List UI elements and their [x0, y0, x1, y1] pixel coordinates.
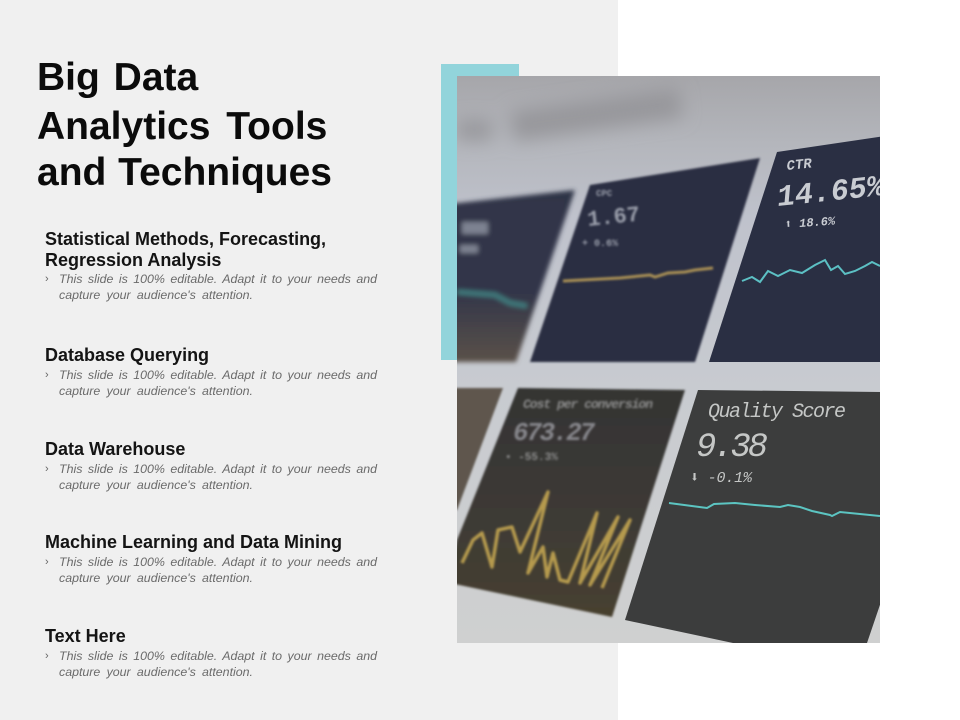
panel: left blurred dashboard card — [450, 190, 575, 362]
card text: CTR — [786, 156, 813, 175]
card text — [582, 189, 641, 250]
panel: CTR dashboard card — [709, 136, 888, 362]
list item: database querying: › — [45, 369, 49, 381]
panel: cost per conversion card — [450, 388, 685, 617]
card text: Cost per conversion — [523, 397, 653, 412]
list item: text here: › — [45, 650, 49, 662]
list item: machine learning: capture your audience's attention. — [59, 571, 253, 585]
card text: + 0.6% — [582, 239, 618, 250]
gold line chart — [462, 492, 630, 588]
list item: database querying: This slide is 100% editable. Adapt it to your needs and — [59, 368, 377, 382]
card text: ⬆ 18.6% — [784, 214, 836, 232]
list item: statistical methods: Statistical Methods, Forecasting, — [45, 229, 326, 249]
list item: text here: capture your audience's attention. — [59, 665, 253, 679]
teal line chart — [742, 260, 880, 282]
list item: statistical methods: Regression Analysis — [45, 250, 221, 270]
list item: database querying: Database Querying — [45, 345, 209, 365]
card text — [690, 401, 846, 487]
list item: machine learning: This slide is 100% editable. Adapt it to your needs and — [59, 555, 377, 569]
left background panel — [0, 0, 618, 720]
list item: data warehouse: capture your audience's attention. — [59, 478, 253, 492]
title: Big Data — [37, 56, 198, 99]
teal line chart — [669, 503, 880, 516]
list item: data warehouse — [45, 439, 378, 492]
list item: data warehouse: Data Warehouse — [45, 439, 185, 459]
blurred header smudge — [457, 88, 683, 141]
list item: machine learning — [45, 532, 378, 585]
photo background — [457, 76, 880, 643]
list item: text here — [45, 626, 378, 679]
panel: middle dashboard card — [530, 158, 760, 362]
panel: lower left sliver card — [450, 388, 503, 510]
list item: machine learning: › — [45, 556, 49, 568]
card text — [505, 397, 653, 464]
card text: 9.38 — [696, 429, 768, 467]
teal accent block — [441, 64, 519, 360]
gold line chart — [563, 268, 713, 281]
list item: statistical methods — [45, 229, 378, 302]
list item: text here: Text Here — [45, 626, 126, 646]
photo: analytics dashboard — [457, 76, 880, 643]
list item: statistical methods: This slide is 100% editable. Adapt it to your needs and — [59, 272, 377, 286]
list item: data warehouse: This slide is 100% editable. Adapt it to your needs and — [59, 462, 377, 476]
card text: 673.27 — [513, 418, 595, 448]
card text: Quality Score — [708, 401, 846, 424]
list item: text here: This slide is 100% editable. Adapt it to your needs and — [59, 649, 377, 663]
card text: ▪ -55.3% — [505, 452, 558, 464]
list item: statistical methods: › — [45, 273, 49, 285]
card text: CPC — [596, 189, 613, 199]
list item: machine learning: Machine Learning and Data Mining — [45, 532, 342, 552]
title — [37, 56, 332, 194]
card text: 1.67 — [586, 203, 641, 233]
list item: data warehouse: › — [45, 463, 49, 475]
card text: ⬇ -0.1% — [690, 470, 753, 487]
list item: database querying: capture your audience's attention. — [59, 384, 253, 398]
panel: quality score card — [625, 390, 885, 643]
card text — [775, 156, 888, 232]
title: and Techniques — [37, 151, 332, 194]
list item: database querying — [45, 345, 378, 398]
title: Analytics Tools — [37, 105, 327, 148]
list item: statistical methods: capture your audience's attention. — [59, 288, 253, 302]
